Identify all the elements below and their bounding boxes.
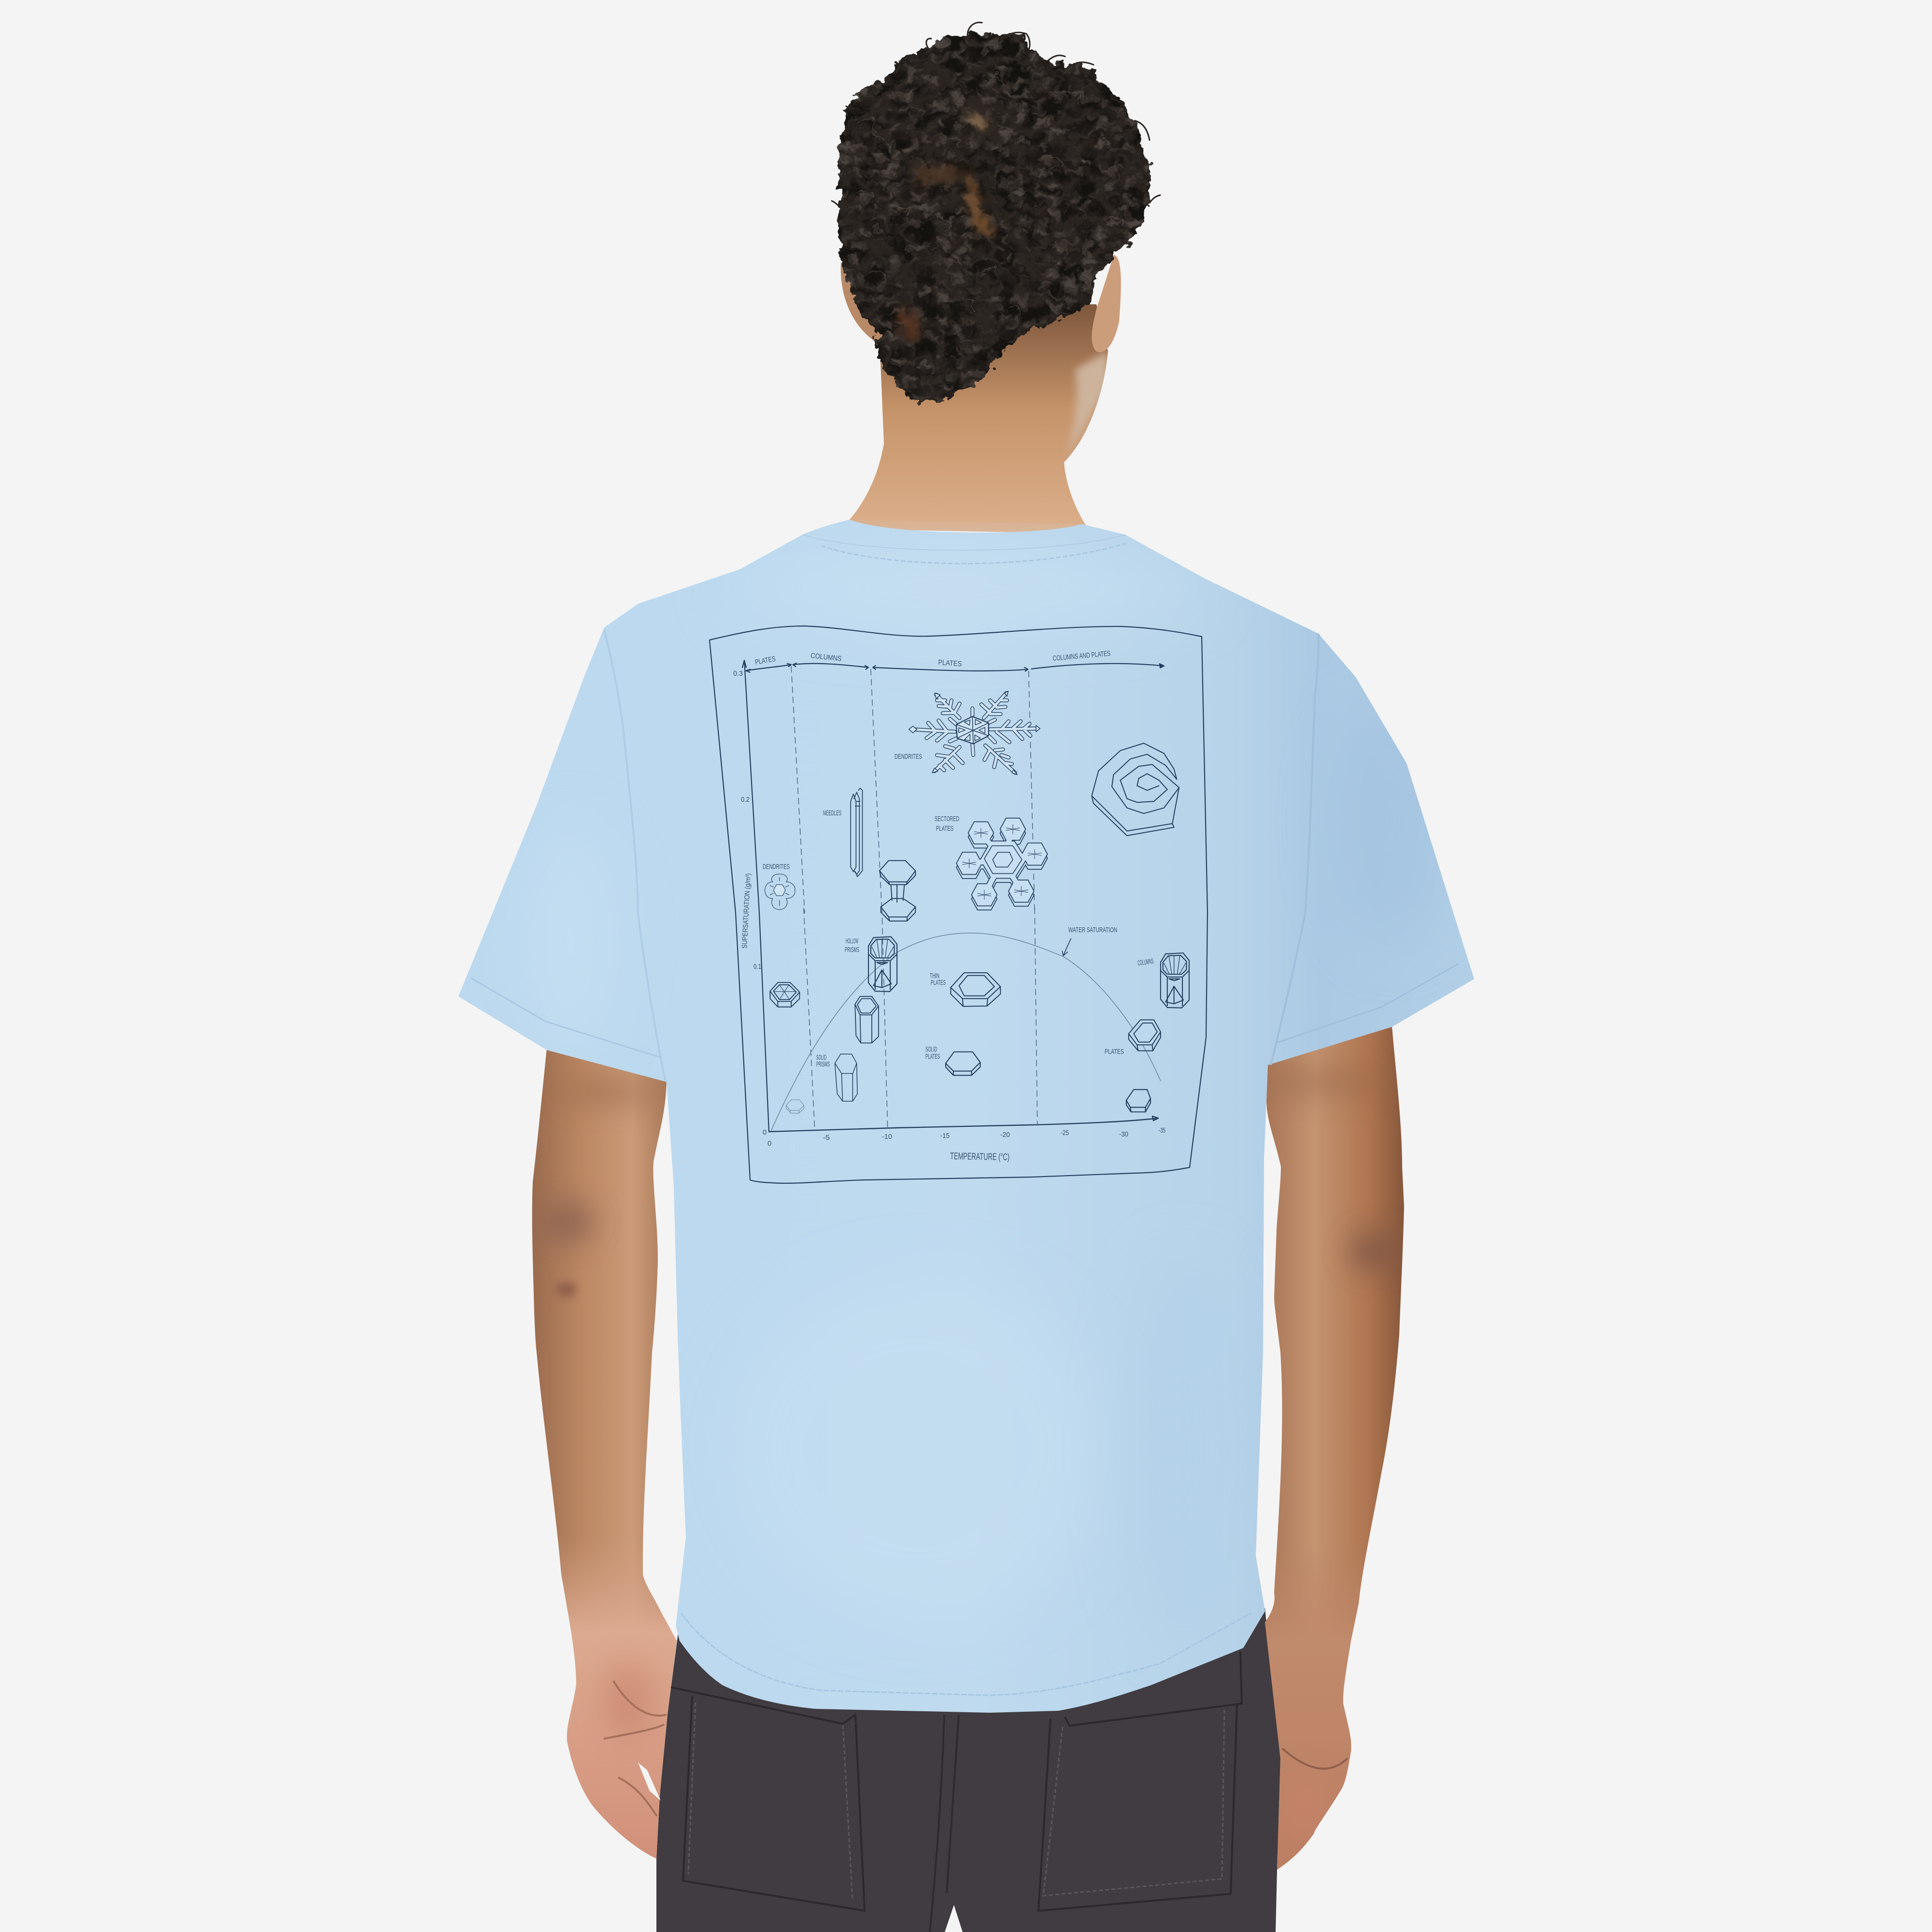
scalp patches <box>967 167 995 237</box>
crystal name labels: PRISMS <box>845 946 859 954</box>
T-shirt body and sleeves <box>458 520 1474 1713</box>
x axis tick labels: -10 <box>882 1133 892 1141</box>
x axis title: TEMPERATURE (°C) <box>950 1151 1009 1163</box>
crystal name labels: DENDRITES <box>763 863 790 871</box>
x axis tick labels <box>767 1126 1165 1148</box>
dashed habit boundaries (lower) <box>804 908 1037 1130</box>
habit labels: PLATES <box>938 658 962 668</box>
printed chart: snow crystal morphology diagram <box>710 626 1208 1183</box>
crystal name labels: PLATES <box>931 979 946 987</box>
habit labels: COLUMNS AND PLATES <box>1052 650 1111 663</box>
belt loop seam <box>930 1715 959 1932</box>
x axis tick labels: -30 <box>1119 1130 1128 1138</box>
dashed habit boundaries (upper) <box>791 667 1035 913</box>
y axis title: SUPERSATURATION (g/m³) <box>740 873 753 949</box>
right thick plate crystal <box>1129 1020 1161 1051</box>
crystal name labels: HOLLOW <box>846 937 858 945</box>
neck and jaw <box>840 304 1108 534</box>
collar stitching <box>821 543 1125 564</box>
sleeve hems <box>471 978 662 1058</box>
curly hair <box>821 19 1169 415</box>
x axis tick labels: -25 <box>1061 1129 1069 1137</box>
lower chart drawings <box>770 908 1189 1131</box>
sectored plate crystal <box>960 821 1044 907</box>
finger gap <box>638 1762 661 1801</box>
crystal name labels: DENDRITES <box>895 753 922 761</box>
crystal name labels: WATER SATURATION <box>1068 926 1117 934</box>
snowflake dendrite crystal <box>909 691 1040 775</box>
trousers <box>656 1608 1280 1932</box>
y axis tick labels: 0.1 <box>753 963 761 971</box>
water saturation curve <box>771 933 1161 1131</box>
x axis tick labels: -20 <box>1000 1131 1010 1139</box>
temperature axis <box>769 1116 1158 1132</box>
x axis tick labels: -5 <box>823 1134 830 1142</box>
crystal habit range arrows <box>746 663 1164 672</box>
curl texture <box>821 19 1169 415</box>
hollow prism crystal <box>868 937 897 992</box>
crystal name labels: SECTORED <box>935 815 959 823</box>
crystal name labels <box>763 753 1154 1068</box>
chart handwritten labels <box>733 650 1165 1163</box>
habit labels: PLATES <box>754 655 776 667</box>
left back pocket <box>670 1687 865 1911</box>
ears <box>841 255 1121 352</box>
upper chart drawings <box>746 663 1179 921</box>
habit labels: COLUMNS <box>810 652 842 663</box>
crystal name labels: THIN <box>930 972 939 980</box>
x axis tick labels: 0 <box>767 1139 771 1148</box>
water saturation pointer <box>1062 938 1071 956</box>
x axis tick labels: -15 <box>940 1132 950 1140</box>
finger creases <box>604 1681 667 1816</box>
crystal name labels: PLATES <box>936 824 953 833</box>
bottom hem stitching <box>681 1613 1251 1695</box>
crystal name labels: SOLID <box>816 1053 826 1062</box>
fabric shading <box>526 551 1444 1642</box>
right small plate crystal <box>1126 1090 1151 1112</box>
crystal name labels: PRISMS <box>816 1060 830 1068</box>
column crystal <box>855 996 879 1043</box>
flyaway curls <box>832 22 1160 208</box>
left arm and hand <box>526 1048 681 1869</box>
product photo: model wearing printed T-shirt <box>458 21 1474 1932</box>
small faint hexagonal plate <box>786 1100 804 1113</box>
hollow column crystal <box>1161 953 1189 1008</box>
crystal name labels: NEEDLES <box>823 809 841 817</box>
print frame <box>710 626 1208 1183</box>
spiral plate crystal <box>1092 743 1179 836</box>
sleeve seams <box>604 630 665 1080</box>
supersaturation axis <box>742 660 769 1132</box>
capped column crystal <box>880 861 915 921</box>
y axis tick labels <box>733 669 767 1136</box>
crystal name labels: PLATES <box>925 1052 940 1061</box>
habit labels <box>754 650 1111 668</box>
chart handwritten labels: COLUMNS <box>1137 957 1154 967</box>
y axis tick labels: 0 <box>763 1128 767 1136</box>
y axis tick labels: 0.2 <box>741 796 750 804</box>
thin plate crystal <box>951 973 1000 1007</box>
needle crystals <box>851 788 863 877</box>
hexagonal plate crystal with spokes <box>770 982 800 1007</box>
crystal name labels: SOLID <box>925 1045 937 1053</box>
palm crease <box>1282 1748 1348 1769</box>
y axis tick labels: 0.3 <box>733 669 743 678</box>
crystal name labels: PLATES <box>1105 1048 1124 1056</box>
x axis tick labels: -35 <box>1159 1126 1165 1135</box>
right arm and hand <box>1265 1027 1404 1870</box>
right back pocket <box>1038 1652 1242 1911</box>
solid prism crystal <box>835 1054 857 1101</box>
solid plate crystal <box>946 1052 980 1075</box>
small dendrite crystal <box>765 874 795 909</box>
